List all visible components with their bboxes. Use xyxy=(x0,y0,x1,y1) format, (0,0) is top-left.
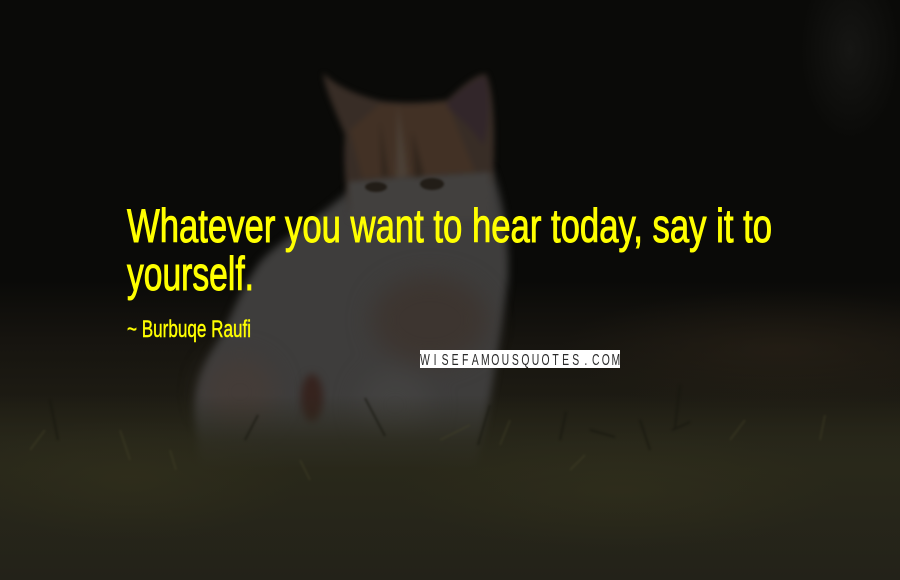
foreground grass xyxy=(0,385,900,580)
watermark badge: WISEFAMOUSQUOTES.COM xyxy=(420,351,620,369)
attribution: ~ Burbuqe Raufi xyxy=(127,316,251,343)
quote text: yourself. xyxy=(127,247,254,300)
kitten fur patches xyxy=(204,276,488,441)
kitten photo xyxy=(195,73,508,470)
kitten leg marking xyxy=(301,374,323,422)
kitten eyes xyxy=(365,178,444,192)
quote text xyxy=(127,199,772,300)
kitten head xyxy=(323,73,494,220)
kitten body xyxy=(195,170,508,470)
